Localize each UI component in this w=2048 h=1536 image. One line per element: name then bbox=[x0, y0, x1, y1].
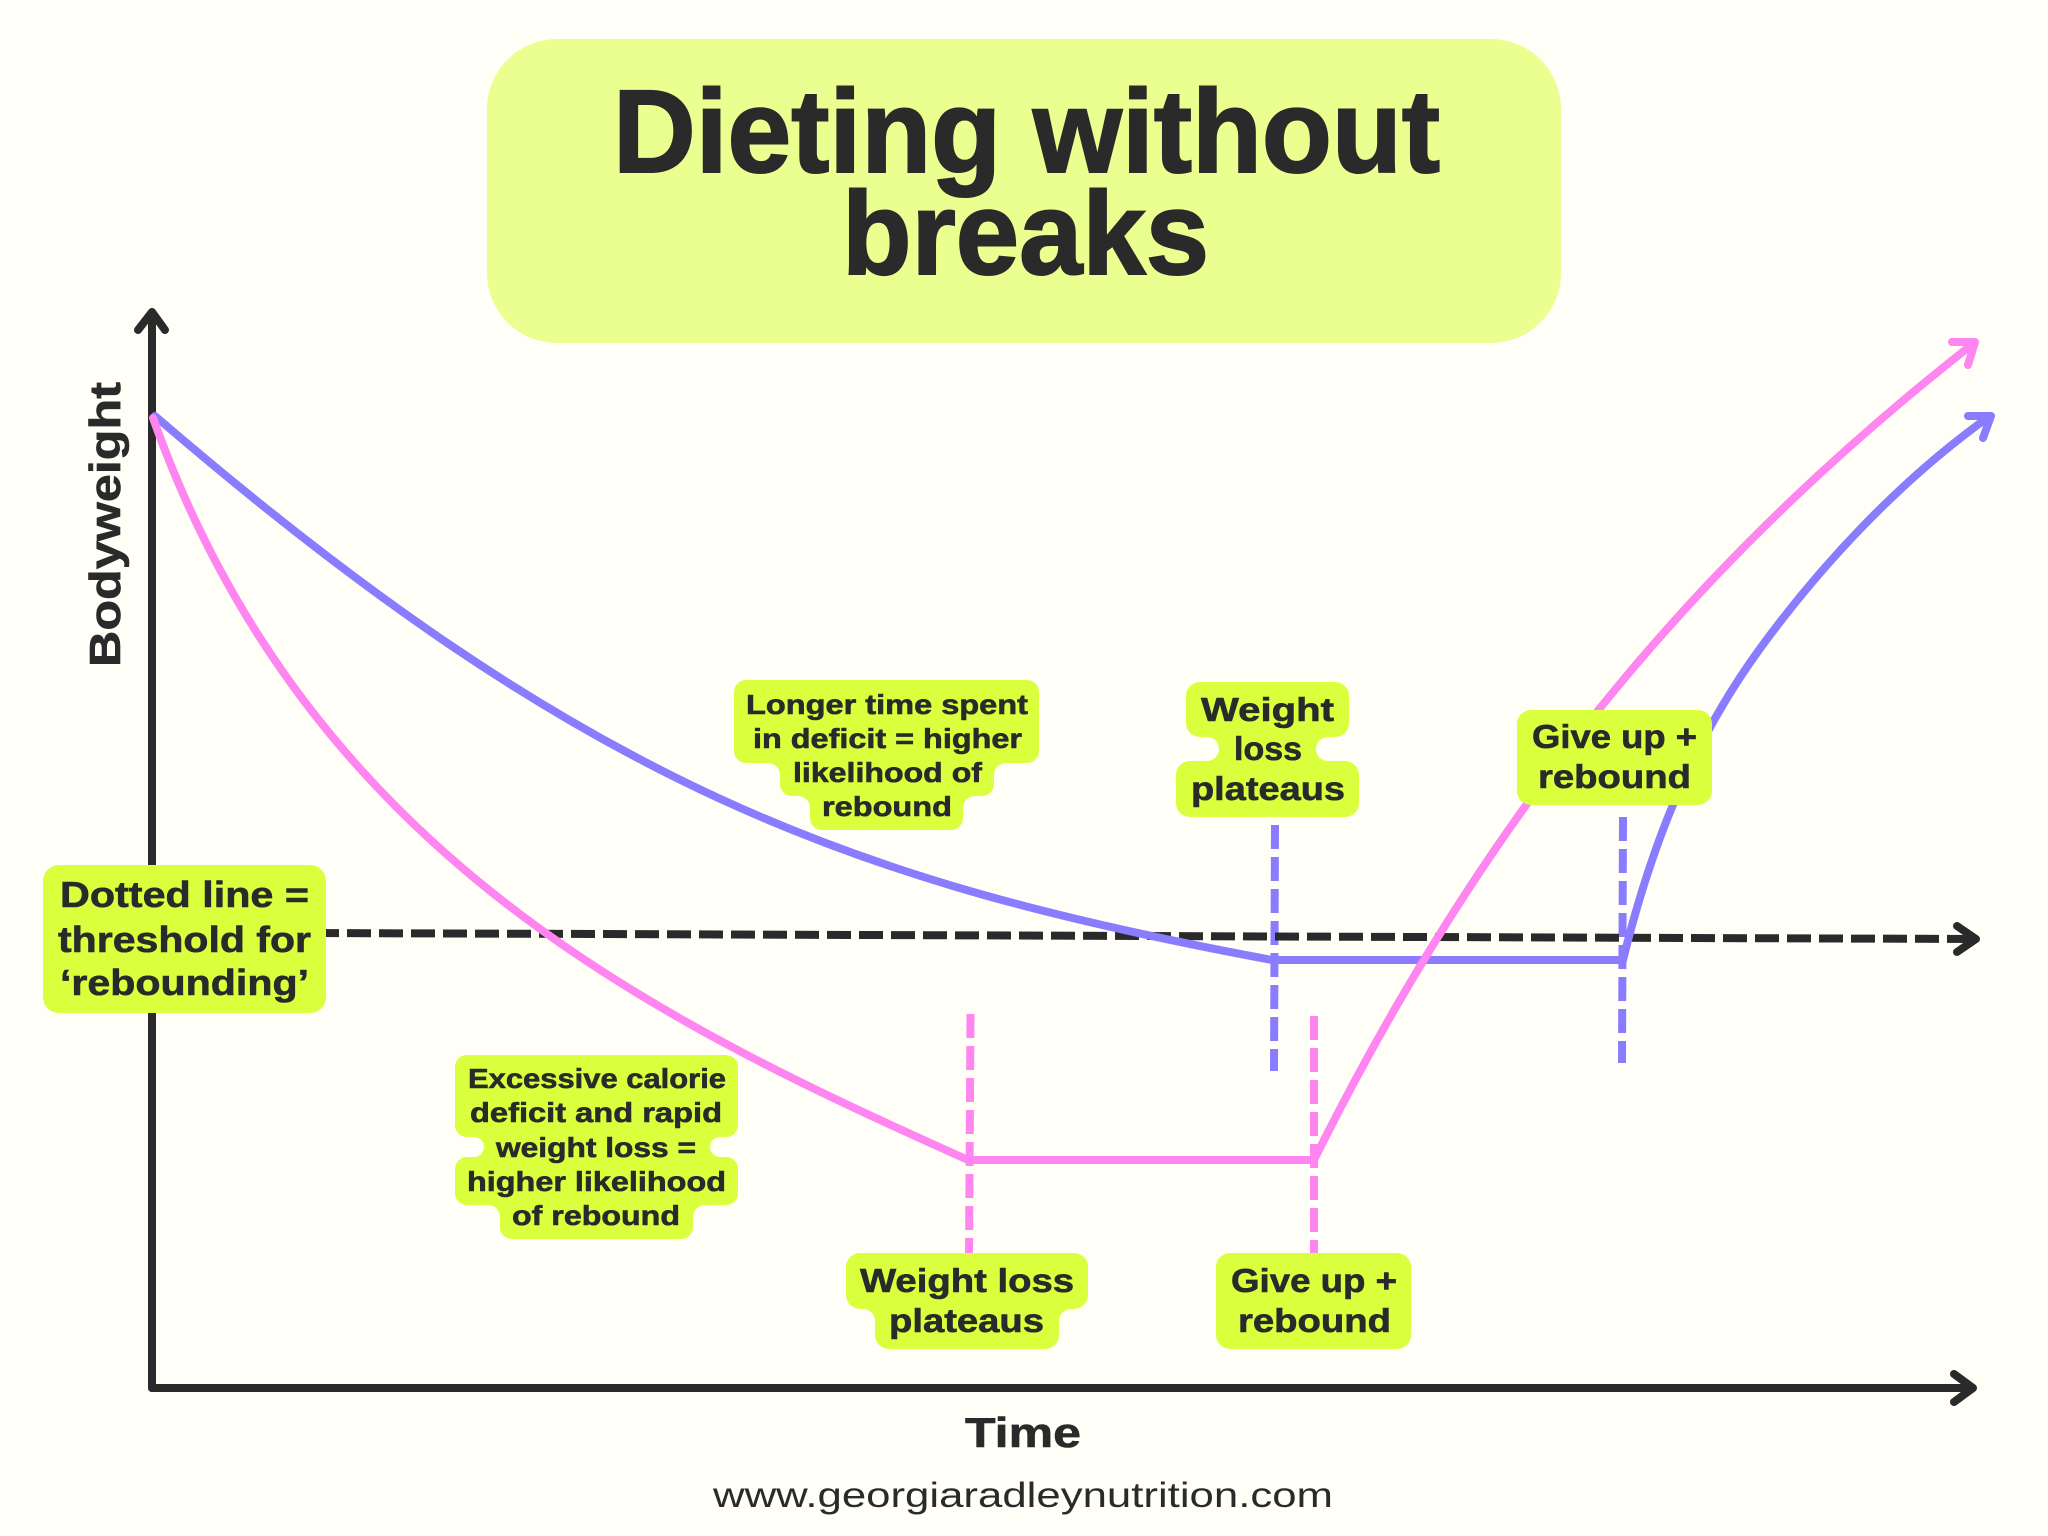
callout: excessive calorie deficit: deficit and rapid bbox=[470, 1097, 722, 1128]
callout: longer time in deficit: likelihood of bbox=[793, 757, 983, 788]
callout: dotted line threshold: Dotted line = bbox=[60, 874, 309, 915]
callout: pink weight loss plateaus: Weight loss bbox=[860, 1262, 1074, 1299]
callout: excessive calorie deficit bbox=[455, 1055, 738, 1239]
callout: dotted line threshold: threshold for bbox=[58, 919, 311, 960]
callout: pink weight loss plateaus bbox=[846, 1253, 1088, 1349]
callout: pink give up and rebound: Give up + bbox=[1231, 1262, 1397, 1299]
callout: longer time in deficit: in deficit = higher bbox=[753, 723, 1022, 754]
blue curve: slower dieting bbox=[155, 416, 1991, 960]
callout: dotted line threshold bbox=[43, 865, 326, 1013]
callout: excessive calorie deficit: Excessive calorie bbox=[468, 1063, 726, 1094]
callout: blue weight loss plateaus bbox=[1176, 682, 1359, 817]
y axis with arrow bbox=[138, 312, 165, 1388]
title text: breaks bbox=[842, 168, 1209, 300]
pink curve: rapid dieting bbox=[153, 342, 1975, 1160]
title panel bbox=[487, 39, 1561, 343]
callout: excessive calorie deficit: of rebound bbox=[512, 1200, 680, 1231]
threshold dashed line bbox=[315, 926, 1976, 952]
blue dashed marker: give up bbox=[1622, 817, 1623, 1063]
y axis label: Bodyweight bbox=[81, 382, 130, 667]
threshold arrowhead bbox=[1957, 926, 1976, 952]
callout: pink weight loss plateaus: plateaus bbox=[889, 1302, 1044, 1339]
pink dashed marker: give up bbox=[1310, 1016, 1318, 1256]
callout: blue give up and rebound bbox=[1517, 710, 1712, 805]
callout: longer time in deficit bbox=[734, 680, 1039, 830]
callout: dotted line threshold: ‘rebounding’ bbox=[60, 962, 309, 1003]
callout: excessive calorie deficit: weight loss = bbox=[495, 1132, 696, 1163]
callout: blue give up and rebound: rebound bbox=[1538, 758, 1691, 795]
callout: pink give up and rebound bbox=[1216, 1253, 1411, 1349]
pink rebound line with arrow bbox=[1314, 342, 1975, 1160]
x axis with arrow bbox=[152, 1374, 1973, 1402]
callout: blue weight loss plateaus: loss bbox=[1234, 730, 1302, 767]
callout: blue give up and rebound: Give up + bbox=[1532, 718, 1697, 755]
callout: blue weight loss plateaus: plateaus bbox=[1191, 770, 1345, 807]
website footer: www.georgiaradleynutrition.com bbox=[712, 1476, 1333, 1515]
callout: pink give up and rebound: rebound bbox=[1238, 1302, 1391, 1339]
title text: Dieting without bbox=[613, 66, 1440, 198]
x axis label: Time bbox=[965, 1409, 1081, 1456]
callout: longer time in deficit: rebound bbox=[822, 791, 952, 822]
blue rebound line with arrow bbox=[1623, 416, 1991, 960]
callout: longer time in deficit: Longer time spent bbox=[746, 689, 1028, 720]
pink dashed marker: plateau bbox=[969, 1014, 970, 1256]
callout: excessive calorie deficit: higher likelihood bbox=[467, 1166, 726, 1197]
blue dashed marker: plateau bbox=[1274, 825, 1275, 1071]
callout: blue weight loss plateaus: Weight bbox=[1201, 691, 1334, 728]
